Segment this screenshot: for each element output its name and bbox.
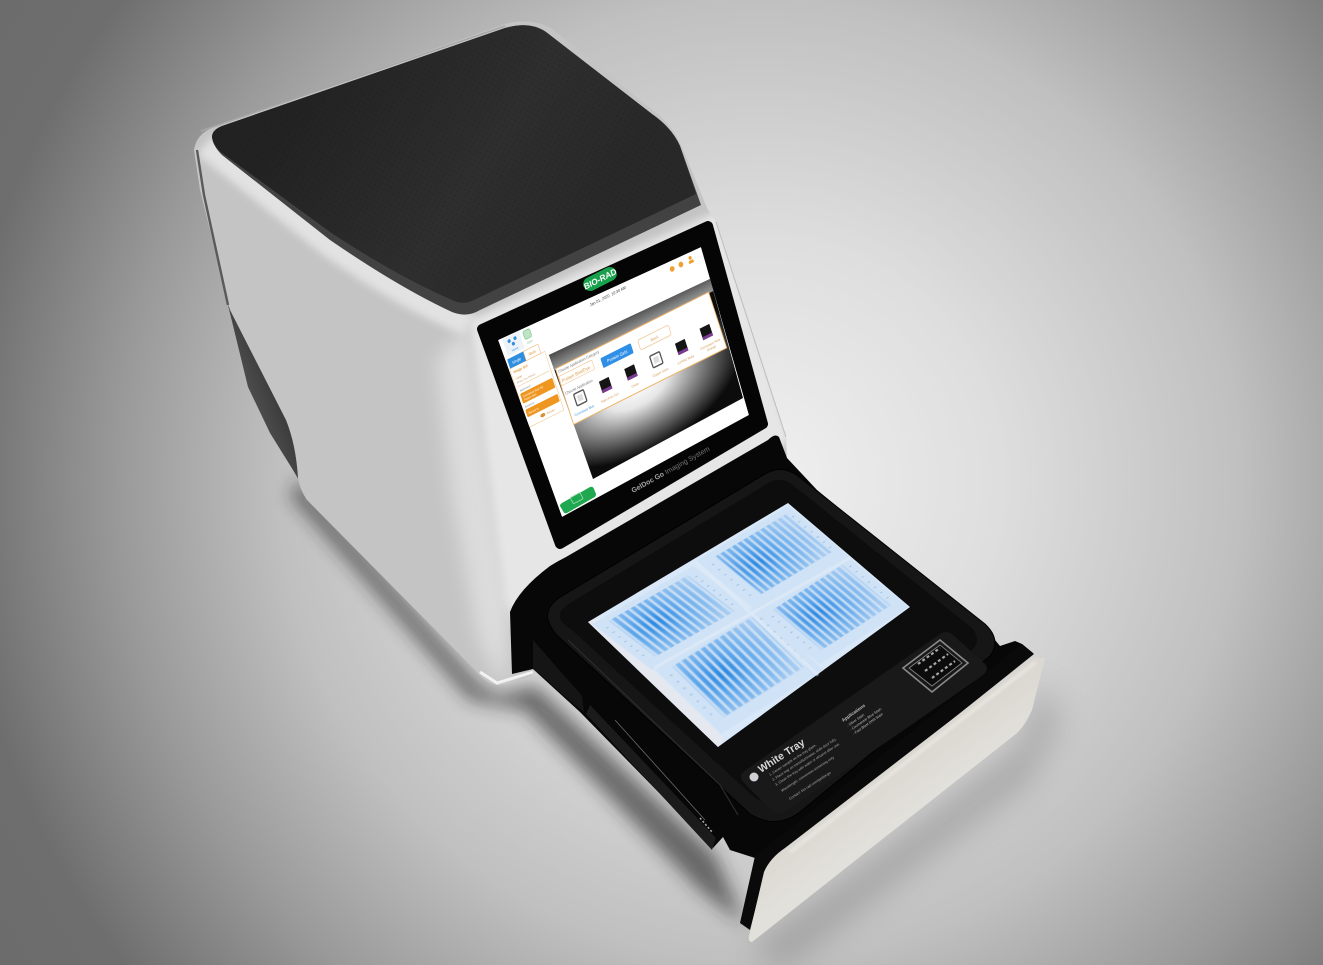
left settings panel: Protein Gels xyxy=(524,392,538,402)
gel: left quadrant xyxy=(592,566,753,670)
target diagram icon xyxy=(903,640,968,692)
left settings panel: Preview xyxy=(546,407,555,415)
category button: protein blot/dye: Protein Blot/Dye xyxy=(561,364,591,384)
instrument body xyxy=(194,21,790,690)
left settings panel: Coomassie Blue Gel xyxy=(523,384,544,398)
gel: top quadrant xyxy=(696,506,850,612)
left settings panel: Exposure xyxy=(524,400,535,409)
category button: protein gels: Protein Gels xyxy=(606,349,628,364)
left settings panel: Image Gel xyxy=(513,363,528,374)
tray instructions: 2. Place tray on transilluminator, slide door fully. xyxy=(771,737,837,782)
instruction label plate xyxy=(741,632,987,814)
imaging preview area xyxy=(549,279,743,479)
home tab icon xyxy=(502,331,524,356)
applications list: - Coomassie Blue Stain xyxy=(849,707,882,732)
application tile: Copper Stain: Copper Stain xyxy=(652,367,669,378)
gel: right quadrant xyxy=(758,555,908,664)
screen contents in skewed screen coordinates xyxy=(502,256,728,428)
open tab icon: Open xyxy=(526,338,534,345)
open drawer frame xyxy=(510,436,1033,858)
back button: Back xyxy=(650,333,660,343)
left settings panel xyxy=(507,342,564,428)
cast shadows on the surface xyxy=(290,480,1060,965)
touchscreen bezel xyxy=(482,226,763,544)
tray instructions xyxy=(768,737,841,801)
textured black top panel xyxy=(212,25,701,315)
application tile: Oriole: Oriole xyxy=(631,381,640,389)
left settings panel: White Tray Default xyxy=(516,372,536,385)
application tile: Stain-Free Gel xyxy=(598,376,619,403)
application tile: Stain-Free Gel: Stain-Free Gel xyxy=(600,391,619,404)
product name on bezel: GelDoc Go Imaging System xyxy=(631,446,711,495)
tray instructions: 3. Clean the tray with water or ethanol after use. xyxy=(774,742,841,787)
drawer front rim xyxy=(740,644,1034,930)
back button xyxy=(638,325,671,350)
left settings panel: Large xyxy=(515,374,523,381)
tray instructions: 1. Center sample on the tray glass. xyxy=(768,743,817,777)
green capture button xyxy=(560,487,596,513)
white imaging glass xyxy=(588,503,910,747)
application tile: Coomassie Blue xyxy=(573,389,594,416)
application tile: Coomassie Fluor Orange: Coomassie Fluor xyxy=(700,337,721,351)
left settings panel: Application xyxy=(519,383,531,393)
application tile: Oriole xyxy=(624,364,639,388)
open tab icon xyxy=(522,328,533,344)
applications list xyxy=(841,703,884,736)
applications list: - Fast Blast DNA Stain xyxy=(852,712,884,736)
application tile: SYPRO Ruby: SYPRO Ruby xyxy=(677,354,695,366)
white tray heading: White Tray xyxy=(756,736,807,776)
drawer slide rail xyxy=(533,640,716,850)
status icons xyxy=(670,256,694,272)
Bio-Rad logo: BIO-RAD xyxy=(582,266,618,292)
left settings panel: Multi xyxy=(528,349,536,357)
application chooser dialog xyxy=(556,292,727,424)
tray instructions: Contact: bio-rad.com/geldocgo xyxy=(788,771,832,801)
gel divider strips xyxy=(654,558,850,675)
date and time: Jan 01, 2020 10:30 AM xyxy=(589,284,627,308)
home tab icon: Home xyxy=(511,345,519,353)
instrument: rear dark foot xyxy=(228,305,300,482)
sample tray xyxy=(548,469,995,822)
application tile: Copper Stain xyxy=(649,351,668,377)
category button: protein gels xyxy=(600,343,634,368)
left settings panel: Manual 1s xyxy=(528,406,540,415)
applications list: Applications xyxy=(841,703,867,723)
gel: bottom quadrant xyxy=(655,605,823,734)
category button: protein blot/dye xyxy=(559,360,595,386)
applications list: - Silver Stain xyxy=(846,713,865,728)
application tile: Coomassie Fluor Orange xyxy=(700,324,720,352)
drawer front plate xyxy=(749,657,1045,942)
application tile: SYPRO Ruby xyxy=(674,338,694,365)
tray instructions: Wavelength: conversion screening only xyxy=(780,755,835,793)
application chooser dialog: Choose Application Category xyxy=(558,350,600,374)
application tile: Coomassie Fluor Orange: Orange xyxy=(706,344,717,353)
application chooser dialog: Choose Application xyxy=(565,378,593,396)
touchscreen display xyxy=(498,244,762,517)
left settings panel: Single xyxy=(512,357,522,365)
application tile: Coomassie Blue: Coomassie Blue xyxy=(574,404,595,417)
